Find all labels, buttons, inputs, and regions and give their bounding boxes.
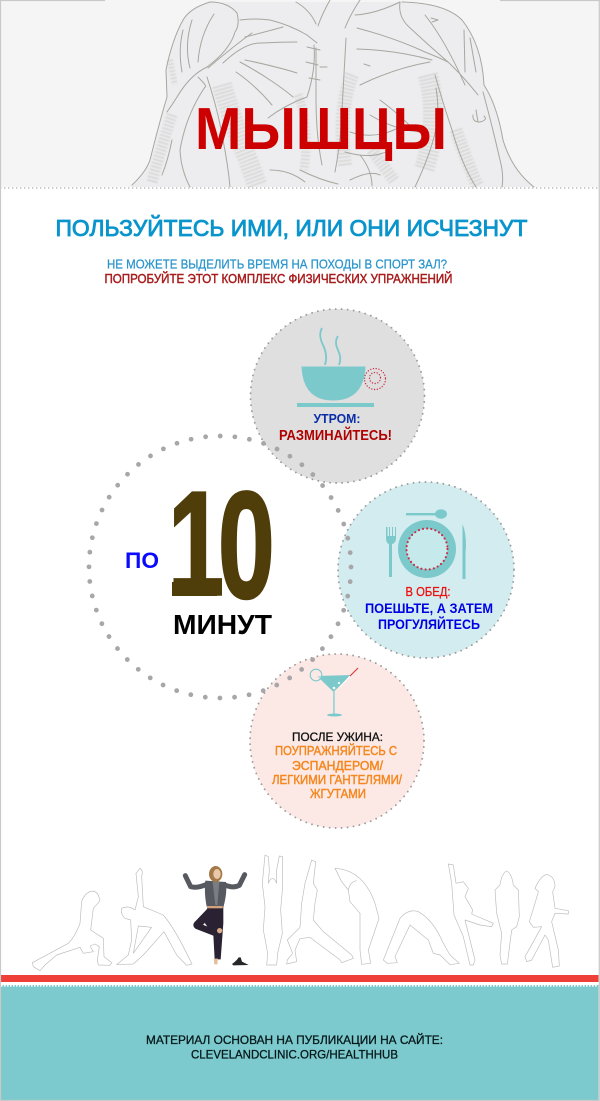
lunch label: В ОБЕД: (406, 585, 450, 599)
exercise silhouettes: left (32, 855, 283, 971)
panel: lunch (338, 482, 514, 658)
red stripe (1, 975, 598, 982)
header background (0, 0, 600, 187)
source text (146, 1032, 443, 1062)
after dinner label: ЛЕГКИМИ ГАНТЕЛЯМИ/ (272, 773, 402, 787)
main figure: 10 minutes (125, 460, 275, 640)
after dinner label: ПОУПРАЖНЯЙТЕСЬ С (275, 743, 397, 758)
dotted divider under header (0, 187, 600, 189)
source text: МАТЕРИАЛ ОСНОВАН НА ПУБЛИКАЦИИ НА САЙТЕ: (146, 1032, 443, 1047)
word: по: ПО (125, 548, 159, 573)
word: минут: МИНУТ (173, 609, 272, 640)
after dinner label: ЖГУТАМИ (310, 787, 366, 801)
morning label: РАЗМИНАЙТЕСЬ! (279, 426, 392, 444)
intro text (104, 258, 452, 286)
morning label (279, 412, 392, 444)
after dinner label: ПОСЛЕ УЖИНА: (292, 730, 383, 744)
lunch label: ПРОГУЛЯЙТЕСЬ (378, 615, 480, 632)
large dotted circle (89, 436, 351, 698)
lunch label (365, 585, 493, 632)
number: 10 (168, 460, 275, 630)
source text: CLEVELANDCLINIC.ORG/HEALTHHUB (191, 1048, 398, 1062)
exercise silhouettes: right (287, 860, 568, 967)
illustration: anatomical torso muscles (130, 0, 534, 187)
panel: morning (250, 309, 424, 483)
icon: plate with cutlery (386, 509, 466, 579)
lunch label: ПОЕШЬТЕ, А ЗАТЕМ (365, 600, 493, 616)
icon: cup of tea (297, 328, 386, 407)
number: 10: 1 (168, 460, 224, 626)
panel: after dinner (250, 654, 424, 828)
morning label: УТРОМ: (314, 412, 360, 426)
icon: martini glass (310, 668, 358, 716)
woman in tree yoga pose (185, 866, 249, 965)
intro text: НЕ МОЖЕТЕ ВЫДЕЛИТЬ ВРЕМЯ НА ПОХОДЫ В СПОРТ ЗАЛ? (107, 258, 447, 272)
title: МЫШЦЫ (195, 96, 447, 162)
intro text: ПОПРОБУЙТЕ ЭТОТ КОМПЛЕКС ФИЗИЧЕСКИХ УПРАЖНЕНИЙ (104, 271, 452, 286)
after dinner label: ЭСПАНДЕРОМ/ (292, 759, 384, 773)
number: 10: 0 (218, 461, 275, 630)
footer panel (1, 985, 598, 1100)
after dinner label (272, 730, 402, 801)
subtitle: ПОЛЬЗУЙТЕСЬ ИМИ, ИЛИ ОНИ ИСЧЕЗНУТ (56, 214, 528, 241)
